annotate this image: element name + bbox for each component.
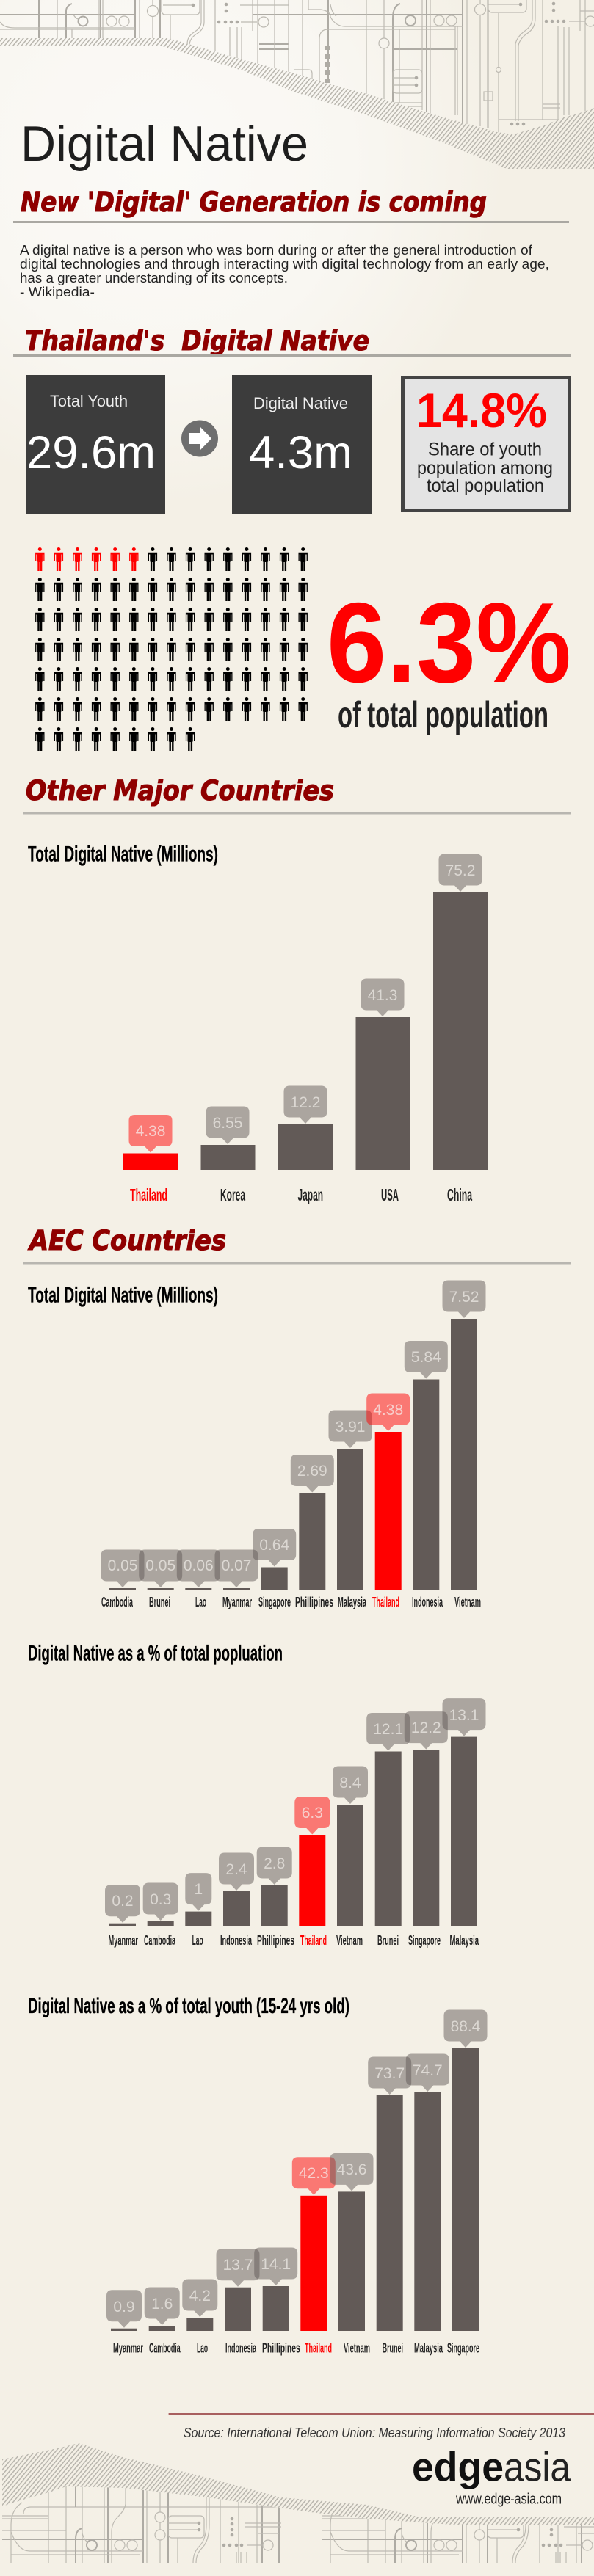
bar: Thailand: 4.38 [373,1402,403,1419]
bar: Malaysia: Malaysia [449,1933,479,1948]
bar: Myanmar [214,1550,258,1609]
bar: Myanmar: 0.07 [222,1557,251,1574]
bar: Myanmar: Myanmar [109,1933,138,1948]
panel: total youth [26,375,165,514]
bar: Vietnam [442,1280,486,1609]
bar: Vietnam [330,2153,373,2355]
bar: Myanmar: 0.9 [113,2299,135,2315]
definition paragraph [20,242,549,299]
bar: Myanmar [106,2290,143,2355]
bar: Malaysia: 74.7 [413,2062,443,2079]
bar: Phillipines: 2.8 [264,1855,285,1872]
bar: Malaysia: 3.91 [336,1419,365,1436]
bar: Singapore: 88.4 [451,2018,481,2035]
heading: new digital generation: New 'Digital' Generation is coming [21,186,487,218]
panel: digital native: Digital Native [253,394,348,412]
bar: Japan: 12.2 [291,1094,320,1111]
bar: Thailand: Thailand [130,1185,167,1204]
bar: Vietnam: 7.52 [449,1289,479,1306]
bar: Cambodia [145,2287,181,2355]
definition paragraph: has a greater understanding of its concepts. [20,270,288,285]
bar: Singapore: Singapore [447,2340,479,2355]
bar: Brunei [368,2056,411,2355]
bar: Singapore: 0.64 [259,1537,289,1554]
bar: Indonesia: Indonesia [225,2340,256,2355]
bar: Cambodia: 0.05 [108,1557,137,1574]
bar: Cambodia [143,1883,178,1948]
bar: USA [355,979,410,1204]
bar: Cambodia: 1.6 [151,2296,173,2313]
bar: Myanmar [105,1885,140,1948]
bar: Brunei: 73.7 [374,2065,405,2082]
bar: USA: 41.3 [368,987,397,1004]
bar: Thailand: Thailand [305,2340,332,2355]
bar: Brunei [139,1550,182,1609]
bar chart: AEC total digital native [101,1280,486,1609]
bar: Japan: Japan [298,1185,323,1204]
bar: Myanmar: Myanmar [222,1595,252,1609]
panel: digital native [232,375,372,514]
bar: Malaysia [406,2053,449,2355]
bar: Vietnam: 43.6 [337,2161,366,2178]
bar: Cambodia [101,1550,144,1609]
bar: Cambodia: 0.3 [150,1891,171,1908]
bar: Lao: 4.2 [189,2288,211,2304]
bar: Singapore [253,1529,296,1609]
bar: Vietnam: Vietnam [344,2340,370,2355]
bar: Phillipines: 2.69 [297,1463,327,1480]
heading: other major countries: Other Major Countries [26,775,334,807]
heading: thailand's digital native: Thailand's Digital Native [25,325,369,357]
bar: China [433,854,488,1204]
logo: edgeasia: asia [504,2444,571,2489]
definition paragraph: - Wikipedia- [20,284,95,299]
chart title: total digital native, AEC: Total Digital Native (Millions) [28,1283,218,1308]
bar: Brunei: Brunei [377,1933,399,1948]
bar: USA: USA [381,1185,399,1204]
bar: Thailand: Thailand [300,1933,327,1948]
bar: Thailand [123,1115,178,1204]
bar chart: percent of total youth [106,2009,488,2355]
panel: digital native: 4.3m [249,427,352,479]
bar: Brunei: Brunei [383,2340,403,2355]
bar: Malaysia: 13.1 [449,1707,479,1724]
bar: Indonesia: 2.4 [225,1861,247,1878]
bar: Malaysia: Malaysia [338,1595,367,1609]
bar: Singapore: 12.2 [411,1720,441,1736]
bar: Thailand [294,1797,330,1948]
bar: Indonesia [216,2249,260,2355]
panel: total youth: 29.6m [26,427,156,479]
bar: Vietnam: Vietnam [454,1595,481,1609]
bar: Vietnam [333,1766,368,1948]
bar: Thailand: 6.3 [302,1805,323,1822]
bar: Singapore [443,2009,488,2355]
bar: Indonesia: Indonesia [220,1933,253,1948]
footer hatch and circuit pattern [2,2443,594,2563]
bar: Phillipines: 14.1 [261,2256,291,2273]
definition paragraph: digital technologies and through interacting with digital technology from an early age, [20,256,549,272]
bar: Singapore: Singapore [258,1595,291,1609]
panel: share of youth: population among [417,458,553,479]
bar: Lao: Lao [197,2340,208,2355]
panel: share of youth: Share of youth [428,439,542,459]
bar: Cambodia: Cambodia [144,1933,175,1948]
definition paragraph: A digital native is a person who was born during or after the general introduction of [20,242,533,258]
logo: edgeasia: edge [412,2444,504,2489]
website: www.edge-asia.com [455,2492,562,2508]
panel: total youth: Total Youth [50,392,128,410]
bar: Singapore [405,1711,448,1948]
bar: Indonesia: 5.84 [411,1349,441,1366]
bar: China: 75.2 [446,862,475,879]
bar: Thailand [366,1393,410,1609]
bar: Myanmar: Myanmar [113,2340,143,2355]
bar: Brunei: 12.1 [373,1721,403,1738]
bar: Korea: 6.55 [213,1115,242,1132]
icon grid: people [35,547,308,751]
bar: Cambodia: Cambodia [101,1595,133,1609]
icon: arrow [181,420,218,456]
bar chart: percent of total youth: Cambodia [149,2340,181,2355]
bar: Malaysia: Malaysia [414,2340,443,2355]
bar: Korea: Korea [220,1185,245,1204]
bar: Lao [185,1873,211,1948]
bar: Korea [201,1107,256,1204]
bar: China: China [447,1185,472,1204]
bar: Thailand: 4.38 [136,1123,165,1140]
bar: Lao: 0.06 [184,1557,214,1574]
bar: Lao: 1 [194,1881,203,1898]
header circuit pattern [0,0,594,134]
bar: Phillipines: Phillipines [295,1595,333,1609]
big stat: 6.3%: 6.3% [327,579,571,706]
panel: share of youth: 14.8% [416,383,547,437]
bar: Indonesia: Indonesia [412,1595,443,1609]
bar: Thailand: 42.3 [299,2165,329,2182]
bar: Phillipines [291,1455,334,1609]
logo: edgeasia [412,2444,571,2489]
bar: Lao [177,1550,220,1609]
bar: Vietnam: 8.4 [339,1775,361,1791]
bar: Lao: Lao [192,1933,203,1948]
bar: Lao: Lao [195,1595,206,1609]
bar: Phillipines [257,1847,294,1948]
bar: Singapore: Singapore [408,1933,441,1948]
chart title: percent of total population: Digital Native as a % of total popluation [28,1641,283,1666]
bar: Malaysia [442,1698,486,1948]
bar: Phillipines: Phillipines [262,2340,300,2355]
bar: Brunei: 0.05 [145,1557,175,1574]
bar: Indonesia: 13.7 [223,2257,253,2274]
bar: Indonesia [405,1341,448,1609]
bar: Brunei: Brunei [149,1595,170,1609]
bar: Thailand: Thailand [372,1595,399,1609]
panel: share of youth: total population [427,476,544,496]
bar: Thailand [292,2157,336,2355]
panel: share of youth [402,377,570,511]
bar: Vietnam: Vietnam [336,1933,363,1948]
bar: Lao [182,2280,217,2355]
bar: Malaysia [329,1411,372,1609]
bar: Myanmar: 0.2 [112,1893,134,1910]
heading: AEC countries: AEC Countries [27,1225,226,1256]
chart title: percent of total youth: Digital Native as a % of total youth (15-24 yrs old) [28,1994,349,2018]
bar chart: other major countries [123,854,488,1204]
bar: Japan [278,1086,333,1204]
bar: Phillipines: Phillipines [257,1933,294,1948]
bar: Indonesia [219,1852,254,1948]
bar chart: percent of total population [105,1698,486,1948]
bar: Phillipines [254,2247,300,2355]
chart title: total digital native, major countries: Total Digital Native (Millions) [28,843,218,866]
bar: Brunei [366,1713,410,1948]
title: Digital Native [21,116,308,172]
